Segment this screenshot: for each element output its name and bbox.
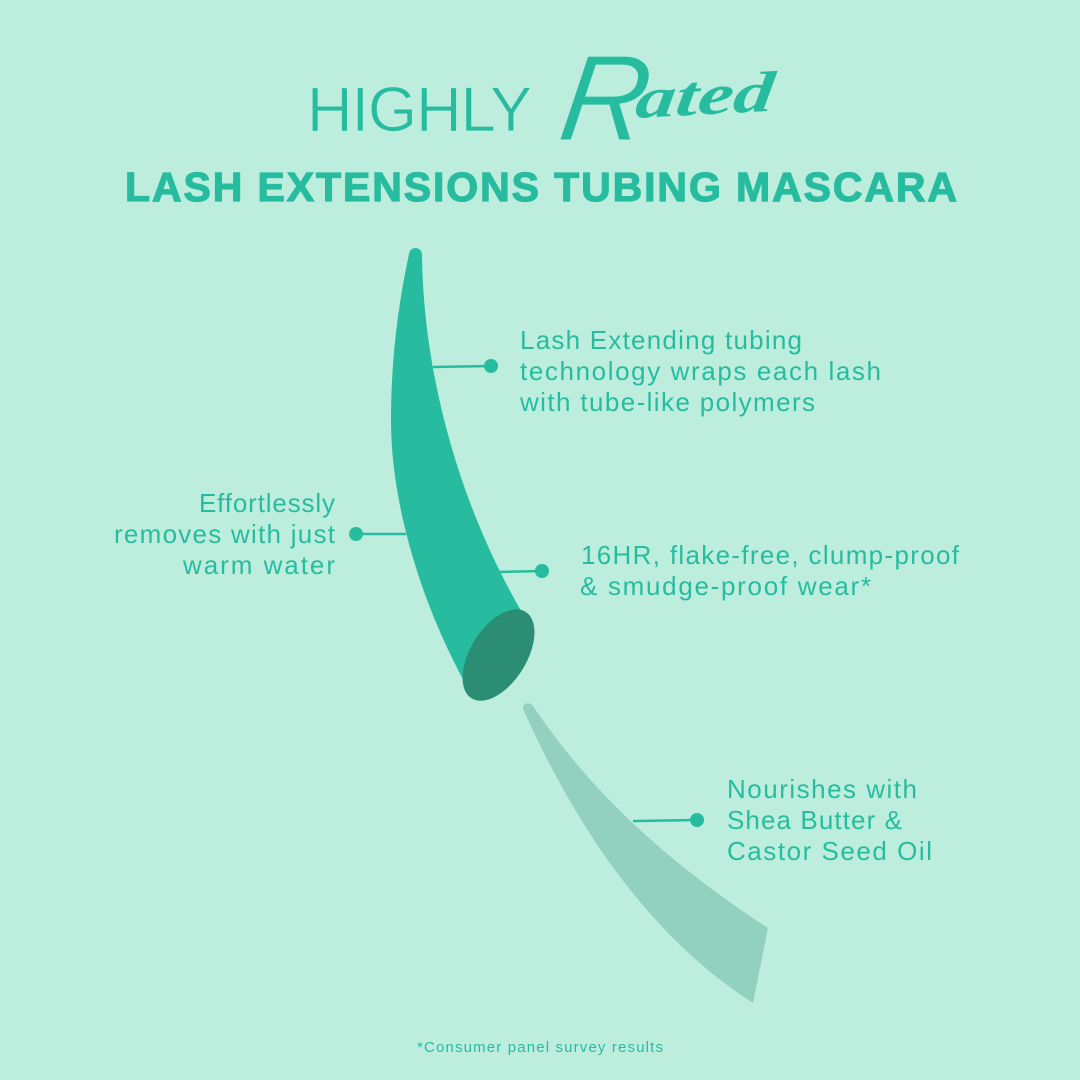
callout: removal: Effortlessly [199, 488, 335, 518]
callout: nourishing: Nourishes with [727, 774, 917, 804]
heading: product name: LASH EXTENSIONS TUBING MASCARA [125, 164, 957, 210]
callout: tubing technology [433, 325, 881, 417]
callout: tubing technology: with tube-like polymers [519, 387, 815, 417]
callout: removal: removes with just [114, 519, 336, 549]
callout: nourishing: Shea Butter & [727, 805, 902, 835]
callout: removal [114, 488, 406, 580]
callout: tubing technology: technology wraps each lash [520, 356, 881, 386]
title: Highly Rated: HIGHLY [307, 75, 532, 145]
title: Highly Rated [307, 30, 780, 166]
illustration: natural lash [523, 703, 768, 1003]
title: Highly Rated: ated [632, 61, 780, 131]
callout: removal: warm water [182, 550, 335, 580]
callout: nourishing: Castor Seed Oil [727, 836, 932, 866]
callout: wear: & smudge-proof wear* [580, 571, 871, 601]
footnote: *Consumer panel survey results [417, 1039, 663, 1056]
illustration: mascara-coated lash tube [391, 248, 549, 713]
title: Highly Rated: R [552, 30, 660, 166]
callout: tubing technology: Lash Extending tubing [520, 325, 802, 355]
callout: wear [498, 540, 960, 601]
callout: nourishing [633, 774, 932, 866]
tube opening [448, 597, 549, 713]
callout: wear: 16HR, flake-free, clump-proof [581, 540, 960, 570]
